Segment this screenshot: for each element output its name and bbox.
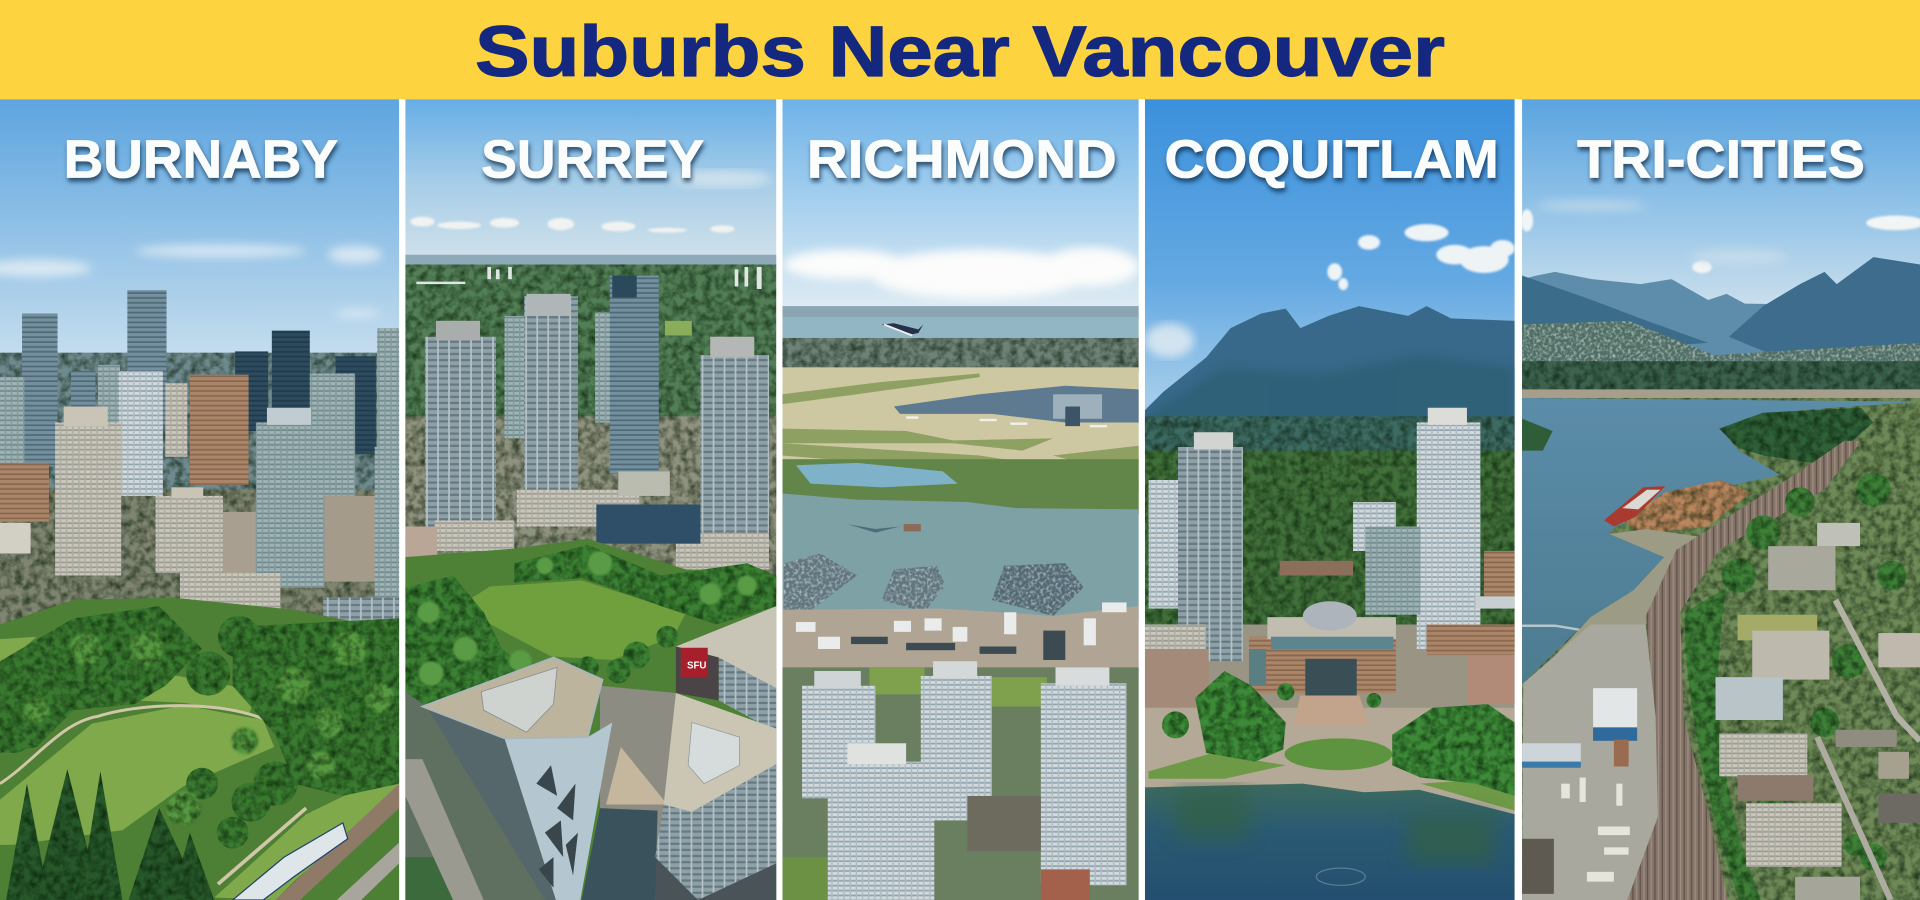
left islet (1522, 419, 1553, 451)
road strip (405, 759, 484, 900)
sky (405, 99, 776, 264)
road (337, 842, 399, 900)
tug boat (904, 524, 921, 531)
podium buildings (405, 471, 769, 569)
haze cloud (673, 170, 771, 187)
civic centre (1249, 601, 1396, 696)
lower right glass (655, 858, 776, 900)
civic stairs (1293, 696, 1369, 725)
marina (784, 553, 1084, 616)
river (782, 493, 1139, 618)
shed base (1522, 762, 1581, 768)
podiums (1145, 596, 1515, 708)
panel: Surrey (405, 99, 776, 900)
label: Coquitlam: COQUITLAM (1164, 130, 1499, 190)
green headland (1719, 408, 1873, 463)
warehouse (1593, 688, 1637, 741)
trucks (1561, 778, 1630, 882)
inlet (796, 463, 958, 487)
low shed (1522, 743, 1581, 762)
left dark trees (405, 857, 456, 900)
clouds (1521, 209, 1920, 273)
tree rows (1722, 473, 1907, 871)
panel: Burnaby (0, 99, 399, 900)
skytrain (233, 823, 348, 900)
lake (1145, 784, 1515, 900)
park trees (405, 545, 776, 710)
mountain (1145, 306, 1515, 441)
east road (1836, 600, 1920, 741)
civic lawn (1284, 738, 1392, 770)
grass fields (782, 667, 1139, 900)
forest foothill (1145, 416, 1515, 453)
label: Richmond: RICHMOND (807, 130, 1117, 190)
park lawn (459, 580, 686, 660)
street and plaza (600, 686, 776, 900)
right peak (1729, 257, 1920, 361)
parked cars (851, 631, 1065, 660)
panel: Tri-Cities (1521, 99, 1920, 900)
label: Tri-Cities: TRI-CITIES (1577, 130, 1865, 190)
terminal (894, 386, 1139, 426)
plane shadow (847, 524, 900, 533)
park paths (0, 706, 272, 784)
haze clouds (1537, 201, 1788, 264)
horizon (405, 255, 776, 269)
left street ground (405, 692, 547, 900)
river (1522, 398, 1920, 683)
fountain ripple (1316, 868, 1365, 885)
sky (0, 99, 399, 381)
glass atrium (582, 808, 658, 900)
golf green (665, 321, 692, 336)
crystal roof box (481, 667, 557, 732)
label: Surrey: SURREY (481, 130, 704, 190)
north shore forest (1522, 361, 1920, 396)
far water (782, 317, 1139, 339)
podium (967, 796, 1041, 851)
centre roof (606, 747, 667, 804)
low glass building (323, 598, 399, 632)
second road (1817, 737, 1891, 900)
distant city (0, 353, 399, 512)
towers (1149, 408, 1515, 661)
ship deck (1622, 490, 1660, 509)
east buildings (1716, 523, 1920, 900)
airport buildings (782, 338, 1139, 372)
bridge (1522, 626, 1592, 632)
label: Burnaby: BURNABY (64, 130, 338, 190)
forest (1145, 451, 1515, 647)
plaza trees (1162, 671, 1515, 796)
red containers (1614, 740, 1629, 767)
green verge (1685, 588, 1761, 900)
left ridge (1522, 276, 1708, 355)
SFU building (676, 606, 776, 732)
clouds (1327, 224, 1515, 290)
shore port (1522, 389, 1920, 399)
plaza (1145, 708, 1515, 818)
tents (796, 602, 1127, 649)
airfield (782, 367, 1139, 514)
clouds (410, 217, 735, 233)
mid buildings (0, 463, 376, 582)
roof garden (1041, 869, 1090, 900)
industrial lot (1522, 624, 1658, 900)
clouds (0, 245, 382, 317)
right building facade (655, 764, 776, 900)
mountain shade (1145, 355, 1515, 441)
sky (1522, 99, 1920, 332)
lake reflections (1176, 790, 1494, 863)
crystal building silver face (504, 722, 612, 900)
skytrain guideway (276, 784, 399, 900)
south path (218, 808, 306, 884)
crystal building reflective face (429, 710, 556, 900)
horizon cloud (1145, 323, 1194, 358)
dark hall (1522, 839, 1554, 894)
shore path (1555, 529, 1714, 661)
towers (425, 276, 769, 539)
town base (1145, 624, 1515, 827)
far hills (782, 306, 1139, 318)
clouds (784, 247, 1139, 299)
plane (882, 323, 923, 336)
park ground (0, 598, 399, 900)
land base (1522, 398, 1920, 900)
docks ground (782, 606, 1139, 673)
side lawns (1149, 753, 1515, 811)
ship (1604, 486, 1665, 527)
marsh base (782, 459, 1139, 514)
title banner (0, 0, 1920, 99)
low city ground (0, 490, 399, 900)
forest (405, 264, 776, 509)
distant towers (416, 267, 762, 289)
sky (1145, 99, 1515, 430)
light tree crowns (418, 551, 757, 686)
far town (405, 416, 776, 594)
east lawn (1738, 615, 1817, 640)
SFU sign: SFU (687, 661, 707, 672)
crystal roof (422, 658, 602, 738)
panel: Coquitlam (1145, 99, 1515, 900)
panel: Richmond (782, 99, 1139, 900)
pale towers (55, 407, 399, 606)
right building roof (664, 693, 776, 812)
trees (0, 606, 399, 900)
apron planes (906, 416, 1107, 427)
low terrace building (180, 573, 280, 610)
sky (782, 99, 1139, 320)
rail corridor (1627, 441, 1861, 900)
neighbourhood houses (1280, 561, 1353, 576)
towers (802, 661, 1127, 900)
right roof box (688, 722, 740, 784)
park ground (405, 539, 776, 900)
airfield strips (782, 373, 1139, 492)
tall towers (0, 290, 399, 496)
park lawns (0, 637, 399, 900)
log yard (1622, 480, 1751, 534)
title: Suburbs Near Vancouver (475, 13, 1445, 92)
crystal facets (536, 765, 578, 888)
back range (1522, 272, 1920, 367)
hillside suburbs (1522, 321, 1920, 398)
